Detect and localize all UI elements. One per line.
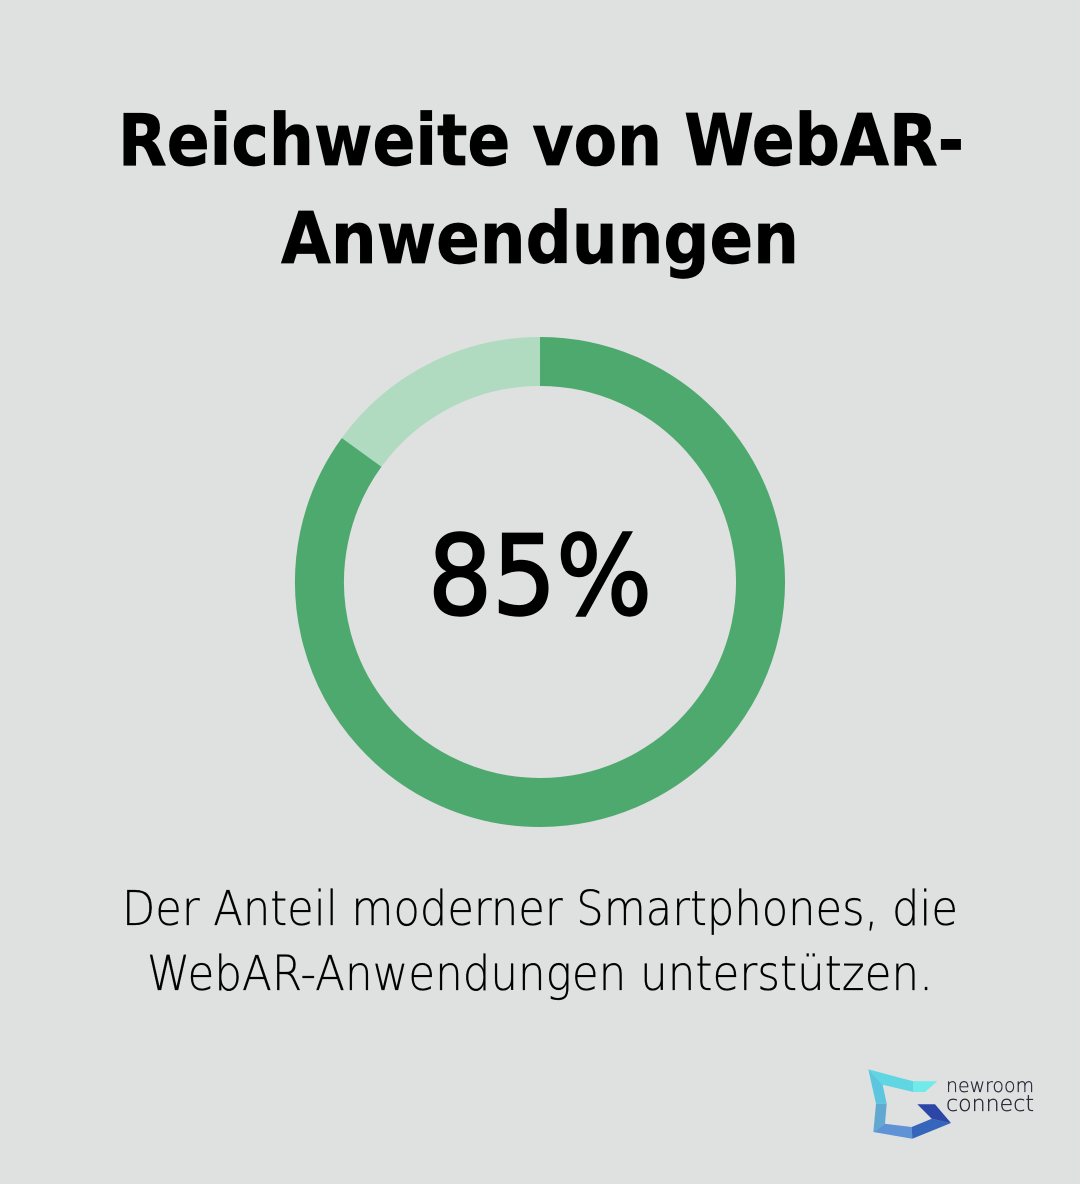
- description: WebAR-Anwendungen unterstützen.: [147, 946, 933, 1002]
- logo wordmark: connect: [946, 1092, 1034, 1117]
- description: Der Anteil moderner Smartphones, die: [122, 881, 958, 937]
- title: Reichweite von WebAR-: [118, 99, 964, 182]
- logo wordmark: [946, 1075, 1034, 1117]
- donut chart: 85%: [319, 362, 760, 802]
- title: Anwendungen: [281, 197, 799, 280]
- title: [118, 99, 964, 280]
- logo: newroom connect: [868, 1069, 1034, 1139]
- remaining 15% segment: [362, 362, 540, 452]
- logo wordmark: newroom: [946, 1075, 1034, 1097]
- description: [122, 881, 958, 1002]
- highlighted 85% segment: [319, 362, 760, 802]
- center value: 85%: [428, 512, 652, 640]
- logo icon: [868, 1069, 951, 1139]
